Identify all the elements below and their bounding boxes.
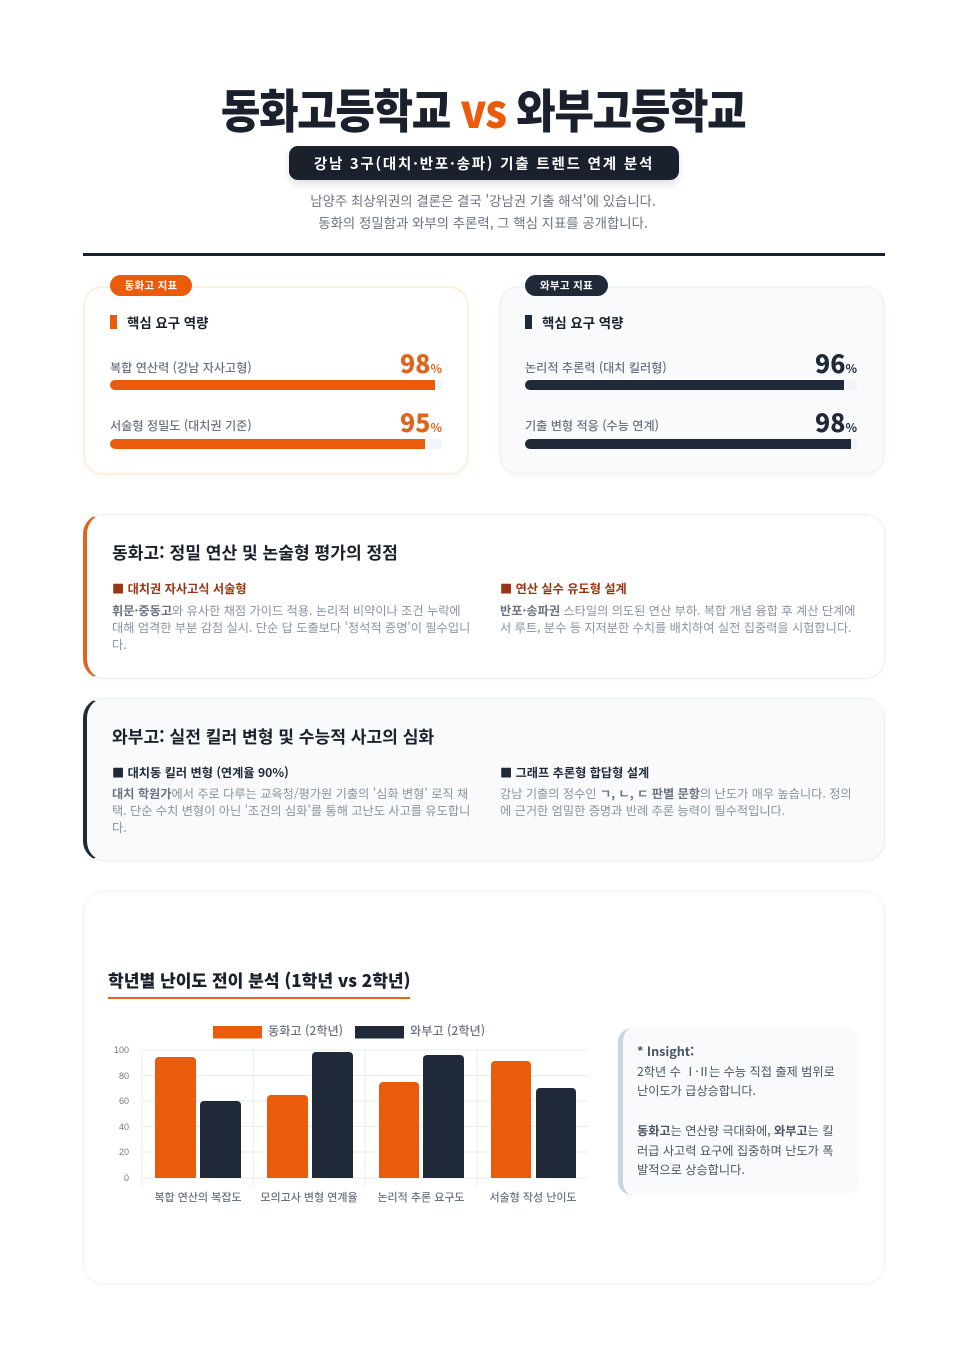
panel: 동화고 분석 [83,514,885,679]
metric: 논리적 추론력: 96% [815,345,857,381]
legend [213,1021,485,1039]
title: 동화고등학교 vs 와부고등학교 [221,75,745,142]
heading: 와부고: 와부고: 실전 킬러 변형 및 수능적 사고의 심화 [112,723,434,748]
metric: 서술형 정밀도 [110,404,442,449]
text: 대치권 자사고식 서술형: 다. [112,635,127,653]
intro text: 남양주 최상위권의 결론은 결국 '강남권 기출 해석'에 있습니다. [310,190,656,210]
panel: 학년별 난이도 [83,891,885,1284]
panel: 와부고 분석 [83,698,885,861]
metric: 서술형 정밀도: 95% [400,404,442,440]
y axis labels: 0 [124,1173,129,1183]
callout: insight: 난이도가 급상승합니다. [637,1081,756,1099]
y axis labels: 40 [119,1122,129,1132]
panel: 와부고 지표 [499,286,885,475]
text: 그래프 추론형 합답형 설계 [500,784,852,819]
intro text [310,190,656,232]
metric: 논리적 추론력 [525,345,857,390]
metric: 논리적 추론력: 논리적 추론력 (대치 킬러형) [525,358,667,376]
bar chart [114,1021,588,1205]
intro text: 동화의 정밀함과 와부의 추론력, 그 핵심 지표를 공개합니다. [318,212,648,232]
callout: insight: * Insight: [637,1041,694,1060]
heading: 동화고: 동화고: 정밀 연산 및 논술형 평가의 정점 [112,539,398,564]
callout: insight [618,1028,859,1195]
callout: insight: 동화고는 연산량 극대화에, 와부고는 킬 [637,1121,833,1139]
callout: insight: 2학년 수 Ⅰ·Ⅱ는 수능 직접 출제 범위로 [637,1062,835,1080]
y axis labels: 100 [114,1045,129,1055]
x axis labels: 복합 연산의 복잡도 [154,1189,242,1205]
tag: 와부고 지표 [525,275,608,296]
bars: 와부고 [200,1052,576,1178]
metric: 복합 연산력: 98% [400,345,442,381]
x axis labels: 모의고사 변형 연계율 [260,1189,358,1205]
text: 그래프 추론형 합답형 설계: 강남 기출의 정수인 ㄱ, ㄴ, ㄷ 판별 문항의 난도가 매우 높습니다. 정의 [500,784,852,802]
tag: 동화고 지표: 동화고 지표 [124,278,178,293]
subheading: 연산 실수 유도형 설계: ■ 연산 실수 유도형 설계 [500,579,627,597]
y axis labels: 80 [119,1071,129,1081]
legend: 와부고 (2학년) [410,1021,485,1039]
subheading: 대치동 킬러 변형: ■ 대치동 킬러 변형 (연계율 90%) [112,763,289,781]
y axis labels: 60 [119,1096,129,1106]
text: 대치권 자사고식 서술형: 대해 엄격한 부분 감점 실시. 단순 답 도출보다 '정석적 증명'이 필수입니 [112,618,470,636]
y axis labels [114,1045,129,1183]
metric: 기출 변형 적응 [525,404,857,449]
tag: 동화고 지표 [110,275,192,296]
text: 대치동 킬러 변형: 택. 단순 수치 변형이 아닌 '조건의 심화'를 통해 고난도 사고를 유도합니 [112,801,470,819]
text: 연산 실수 유도형 설계 [500,601,855,636]
text: 연산 실수 유도형 설계: 반포·송파권 스타일의 의도된 연산 부하. 복합 개념 융합 후 계산 단계에 [500,601,855,619]
x axis labels [154,1189,577,1205]
bars: 동화고 [155,1057,531,1178]
heading: 핵심 요구 역량 (와부고): 핵심 요구 역량 [542,312,623,332]
callout: insight: 러급 사고력 요구에 집중하며 난도가 폭 [637,1141,833,1159]
tag: 와부고 지표: 와부고 지표 [540,278,593,293]
subtitle pill: 강남 3구(대치·반포·송파) 기출 트렌드 연계 분석 [314,153,654,174]
text: 대치동 킬러 변형: 대치 학원가에서 주로 다루는 교육청/평가원 기출의 '심화 변형' 로직 채 [112,784,468,802]
text: 대치권 자사고식 서술형 [112,601,470,653]
panel: 동화고 지표 [83,286,469,475]
x axis labels: 논리적 추론 요구도 [377,1189,465,1205]
text: 대치동 킬러 변형: 다. [112,818,127,836]
metric: 기출 변형 적응: 98% [815,404,857,440]
legend: 동화고 (2학년) [268,1021,343,1039]
callout: insight: 발적으로 상승합니다. [637,1160,745,1178]
metric: 복합 연산력: 복합 연산력 (강남 자사고형) [110,358,252,376]
metric: 서술형 정밀도: 서술형 정밀도 (대치권 기준) [110,416,252,434]
metric: 기출 변형 적응: 기출 변형 적응 (수능 연계) [525,416,659,434]
x axis labels: 서술형 작성 난이도 [489,1189,577,1205]
subheading: 대치권 자사고식 서술형: ■ 대치권 자사고식 서술형 [112,579,247,597]
text: 그래프 추론형 합답형 설계: 에 근거한 엄밀한 증명과 반례 추론 능력이 필수적입니다. [500,801,785,819]
text: 연산 실수 유도형 설계: 서 루트, 분수 등 지저분한 수치를 배치하여 실전 집중력을 시험합니다. [500,618,851,636]
subtitle pill [289,146,679,180]
metric: 복합 연산력 [110,345,442,390]
heading: 핵심 요구 역량 (동화고): 핵심 요구 역량 [127,312,208,332]
text: 대치동 킬러 변형 [112,784,470,836]
y axis labels: 20 [119,1147,129,1157]
text: 대치권 자사고식 서술형: 휘문·중동고와 유사한 채점 가이드 적용. 논리적 비약이나 조건 누락에 [112,601,461,619]
subheading: 그래프 추론형 합답형 설계: ■ 그래프 추론형 합답형 설계 [500,763,649,781]
heading: 학년별 난이도 전이 분석: 학년별 난이도 전이 분석 (1학년 vs 2학년) [108,967,411,992]
